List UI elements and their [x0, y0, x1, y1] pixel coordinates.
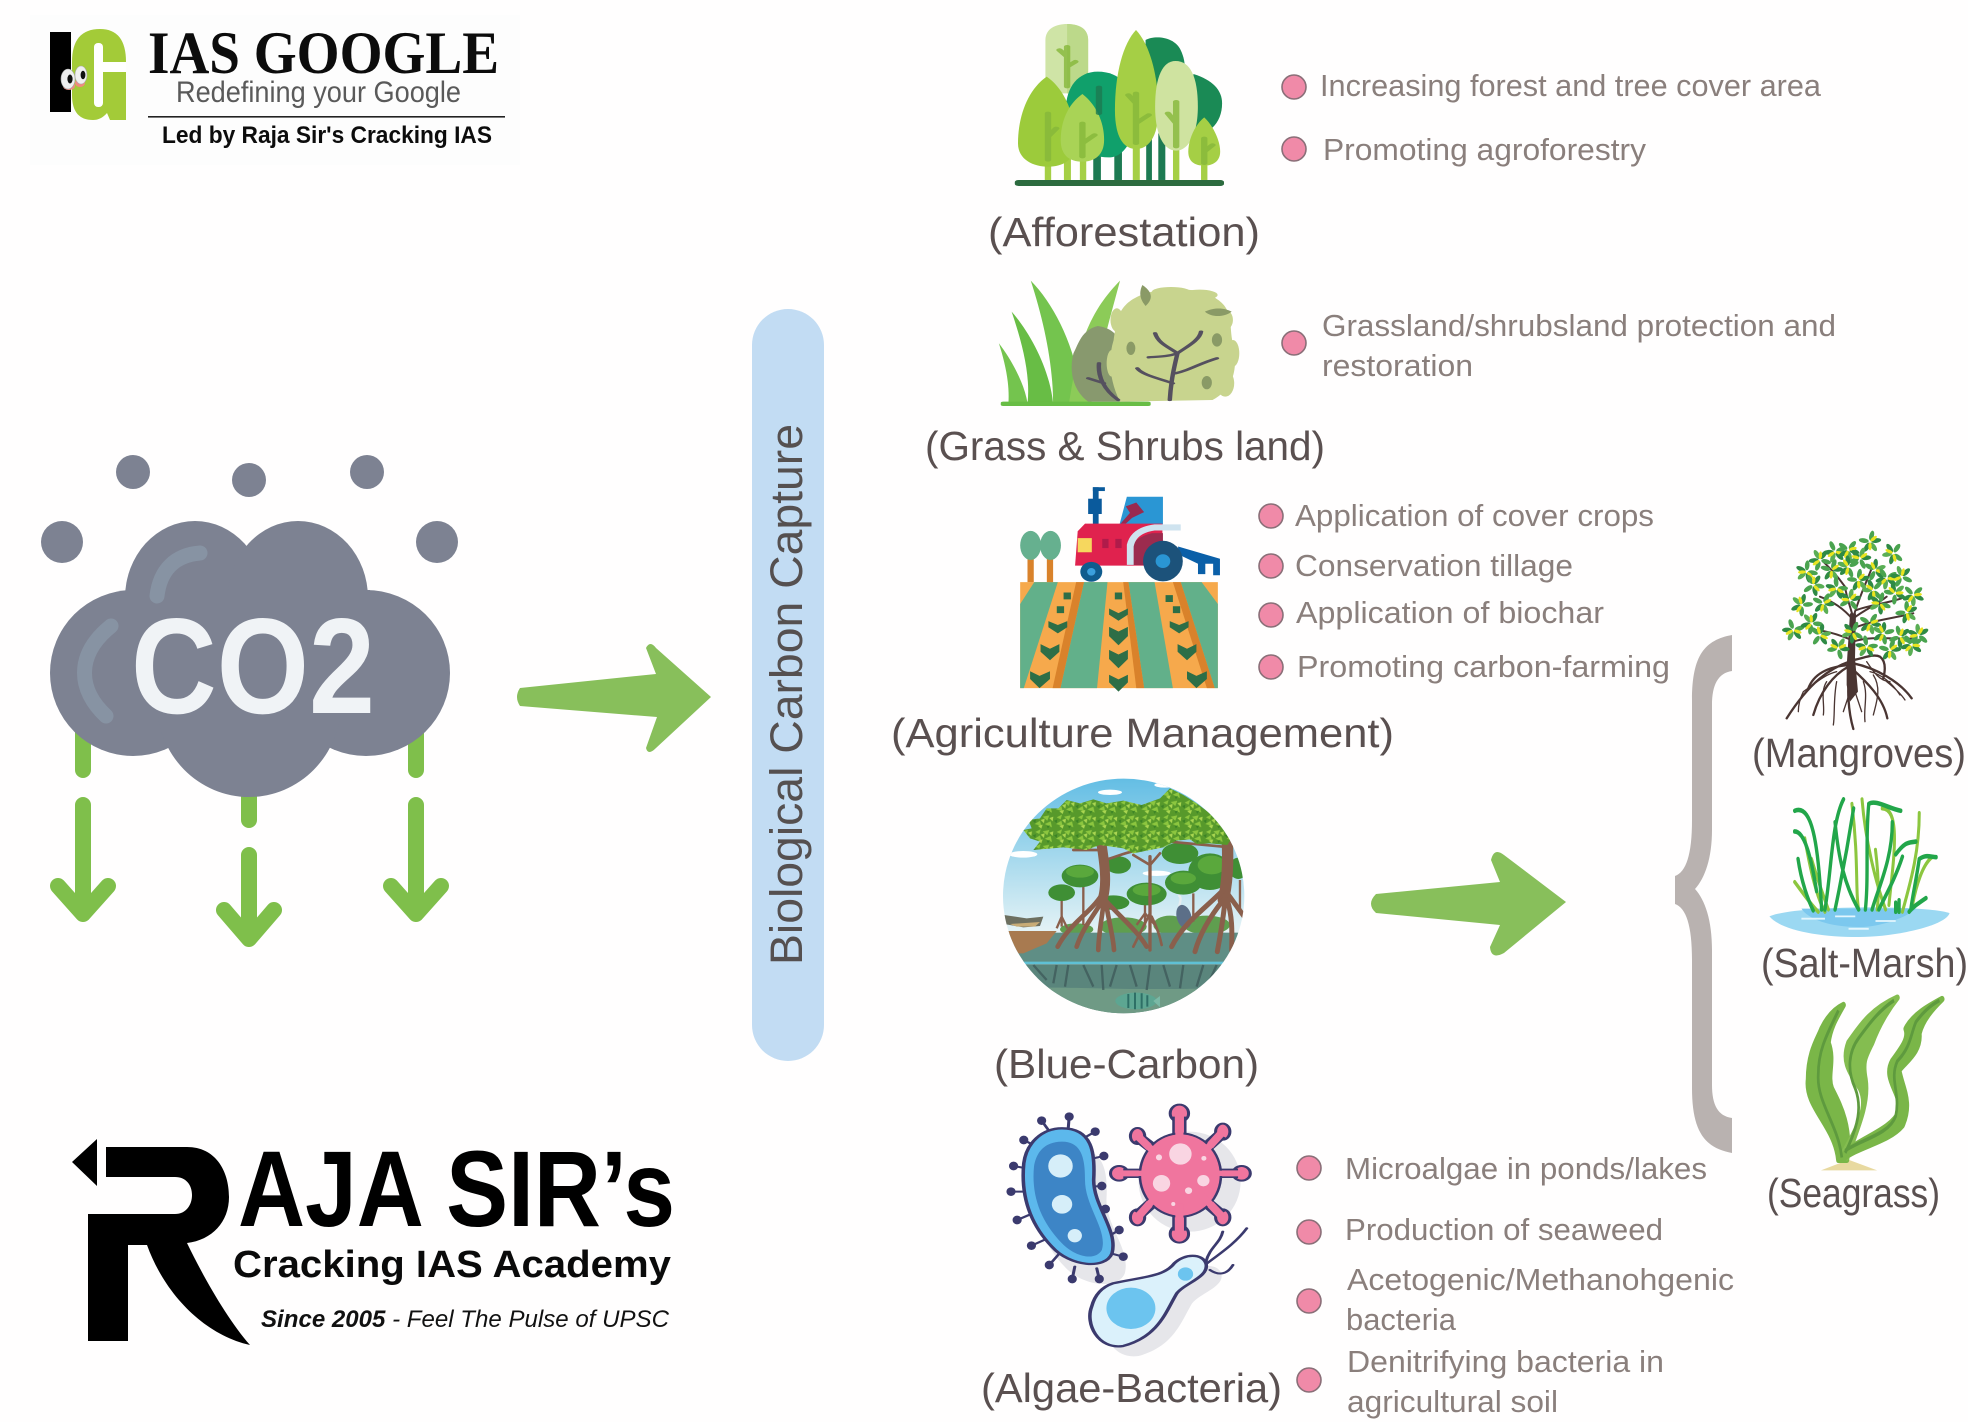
bullet: agroforestry: Promoting agroforestry	[1323, 132, 1646, 167]
icon: algae and bacteria microbes	[1008, 1105, 1250, 1356]
logo: Raja Sir's Cracking IAS Academy	[72, 1128, 675, 1345]
panel: biological carbon capture bar	[752, 309, 824, 1061]
icon: IG monogram	[50, 29, 126, 120]
cloud label: CO2	[131, 590, 375, 742]
bullet: carbon farming: Promoting carbon-farming	[1297, 649, 1670, 684]
virus microbe	[1111, 1105, 1250, 1243]
small tree trunks	[1057, 880, 1240, 928]
bullet: acetogenic bacteria: bacteria	[1346, 1302, 1457, 1337]
logo tagline: Redefining your Google	[176, 76, 461, 109]
icon: afforestation trees	[1015, 24, 1224, 186]
icon: tractor on farm field	[1020, 487, 1220, 692]
cloud	[50, 521, 450, 797]
bullet: denitrifying bacteria	[1297, 1344, 1664, 1419]
bullet: seaweed: Production of seaweed	[1345, 1212, 1663, 1247]
sky	[1000, 777, 1248, 937]
fish	[1115, 993, 1157, 1009]
bullet: acetogenic bacteria	[1297, 1262, 1734, 1337]
down arrows	[58, 720, 441, 939]
bullet: grassland protection: restoration	[1322, 348, 1473, 383]
icon: CO2 cloud with down arrows	[41, 455, 458, 939]
bullet: denitrifying bacteria: Denitrifying bacteria in	[1347, 1344, 1664, 1379]
heading: algae bacteria: (Algae-Bacteria)	[981, 1365, 1282, 1411]
icon: seagrass	[1808, 998, 1942, 1170]
heading: blue carbon: (Blue-Carbon)	[994, 1041, 1259, 1087]
bullet: biochar: Application of biochar	[1296, 595, 1604, 630]
icon: grass and shrubs	[999, 281, 1239, 406]
icon: mangrove scene	[1000, 777, 1248, 1015]
mud and water	[1000, 933, 1248, 963]
logo title: IAS GOOGLE	[148, 20, 499, 86]
roots	[1787, 656, 1912, 729]
arrow: CO2 to capture	[517, 644, 711, 752]
far bushes	[1060, 916, 1230, 933]
logo title: AJA SIR’s	[238, 1128, 675, 1249]
branches	[1817, 562, 1917, 642]
bullet: increasing forest: Increasing forest and tree cover area	[1320, 68, 1822, 103]
particles	[41, 455, 458, 563]
icon: R letterform with arrow	[72, 1139, 250, 1345]
icon: curly brace	[1675, 635, 1732, 1153]
main mangrove trunks	[1058, 842, 1247, 952]
heading: seagrass: (Seagrass)	[1767, 1170, 1940, 1216]
bullet: cover crops: Application of cover crops	[1295, 498, 1654, 533]
rod bacterium	[1008, 1113, 1126, 1282]
heron	[1178, 895, 1181, 910]
bullet: denitrifying bacteria: agricultural soil	[1347, 1384, 1558, 1419]
icon: salt marsh	[1769, 799, 1950, 937]
heading: agriculture management: (Agriculture Management)	[891, 710, 1394, 756]
logo: IAS Google	[30, 15, 520, 165]
mid tree canopies	[1048, 843, 1248, 910]
logo subline: Led by Raja Sir's Cracking IAS	[162, 122, 492, 149]
arrow: blue carbon to ecosystems	[1371, 852, 1566, 955]
flagellate microbe	[1090, 1228, 1247, 1346]
heading: afforestation: (Afforestation)	[988, 209, 1260, 255]
main canopy	[1023, 788, 1232, 853]
leaf clusters	[1779, 528, 1935, 665]
bullet: microalgae: Microalgae in ponds/lakes	[1345, 1151, 1707, 1186]
logo subtitle: Cracking IAS Academy	[233, 1244, 671, 1286]
bullet: grassland protection	[1282, 308, 1836, 383]
bullet: grassland protection: Grassland/shrubsland protection and	[1322, 308, 1836, 343]
microbe shadows	[1036, 1132, 1241, 1356]
logo tagline: Since 2005 - Feel The Pulse of UPSC	[261, 1306, 670, 1333]
icon: mangrove tree	[1779, 528, 1935, 729]
bullet: conservation tillage: Conservation tillage	[1295, 548, 1573, 583]
bar label: Biological Carbon Capture	[761, 424, 812, 965]
bullet: acetogenic bacteria: Acetogenic/Methanohgenic	[1347, 1262, 1734, 1297]
heading: grass and shrubs land: (Grass & Shrubs land)	[925, 423, 1325, 469]
